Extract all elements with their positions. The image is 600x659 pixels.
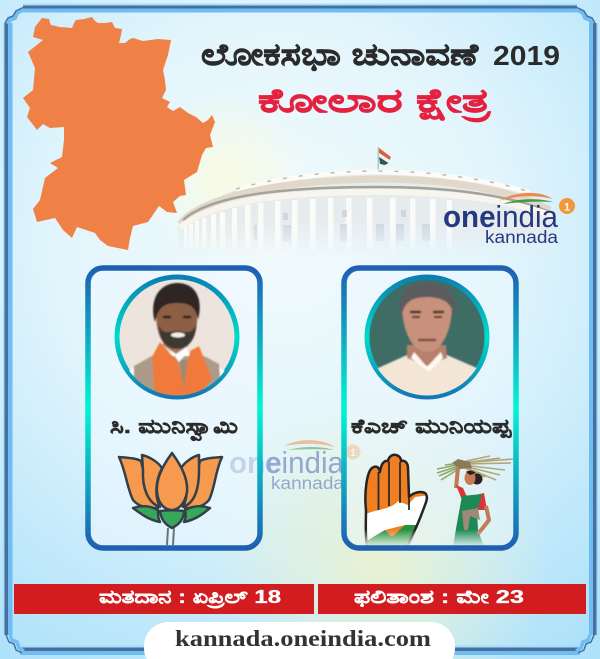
candidate photo: C. Muniswamy [117, 277, 237, 400]
logo: oneindia kannada [443, 193, 575, 247]
website pill: kannada.oneindia.com [175, 626, 431, 651]
panel: left candidate [88, 268, 260, 548]
logo watermark [229, 440, 360, 493]
title [201, 37, 560, 72]
title: 2019 [493, 40, 560, 71]
logo watermark: oneindia [229, 445, 345, 480]
subtitle: ಕೋಲಾರ ಕ್ಷೇತ್ರ [258, 82, 492, 122]
parliament building [177, 147, 553, 244]
website pill [144, 622, 455, 659]
banner: polling date [14, 584, 314, 614]
logo: oneindia kannada: oneindia [443, 199, 559, 234]
logo: oneindia kannada: kannada [485, 227, 558, 247]
colonnade [184, 198, 452, 242]
flag [378, 147, 391, 175]
panel: right candidate [344, 268, 516, 550]
candidate name: ಸಿ. ಮುನಿಸ್ವಾಮಿ [110, 416, 238, 441]
watermark badge: 1 [350, 447, 356, 459]
icon: woman farmer with sheaf [437, 456, 513, 547]
candidate name: ಕೆಎಚ್ ಮುನಿಯಪ್ಪ [351, 416, 512, 438]
title: ಲೋಕಸಭಾ ಚುನಾವಣೆ [201, 37, 479, 72]
logo watermark: kannada [271, 473, 344, 493]
banner: result date: ಫಲಿತಾಂಶ : ಮೇ 23 [354, 587, 524, 607]
logo badge: 1 [564, 202, 570, 214]
candidate photo: K.H. Muniyappa [367, 277, 487, 400]
banner: polling date: ಮತದಾನ : ಏಪ್ರಿಲ್ 18 [99, 587, 281, 609]
icon: BJP lotus [119, 453, 222, 545]
map of Kolar constituency [23, 17, 215, 250]
icon: Congress hand [364, 454, 428, 546]
banner: result date [318, 584, 586, 614]
